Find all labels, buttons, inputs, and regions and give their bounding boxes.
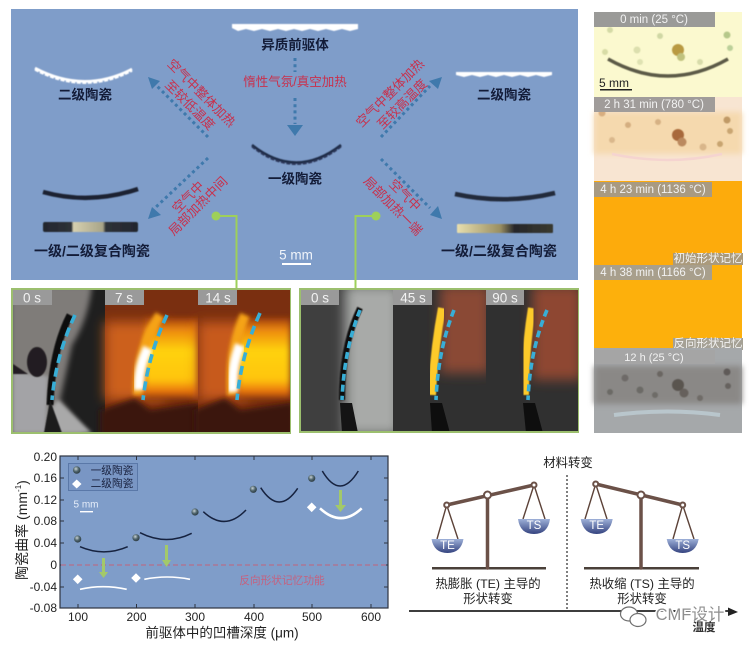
y axis tick labels: 0 [50, 558, 57, 572]
x axis title: 前驱体中的凹槽深度 (μm) [145, 624, 299, 640]
scale: thermal shrinkage dominant: TE [589, 520, 604, 532]
panel: local heating at one end photo strip [300, 285, 582, 435]
y axis tick labels: -0.08 [30, 601, 57, 615]
label: right composite ceramic: 一级/二级复合陶瓷 [441, 243, 557, 259]
label: left composite ceramic: 一级/二级复合陶瓷 [34, 243, 150, 259]
y axis title: -1 [14, 484, 22, 492]
y axis tick labels [30, 450, 57, 615]
zero reference line [61, 564, 387, 566]
time tags [301, 290, 524, 306]
photo: 0 s [13, 290, 105, 432]
scale: thermal shrinkage dominant [581, 482, 699, 568]
connector: end heating to right photos [356, 212, 380, 289]
label: temperature: 温度 [692, 620, 716, 634]
time tags: 7 s [115, 290, 133, 306]
y axis tick labels: 0.12 [34, 493, 57, 507]
y axis tick labels: 0.20 [34, 450, 57, 464]
x axis tick labels: 200 [126, 610, 147, 624]
legend [68, 464, 138, 490]
frame: 2 h 31 min [594, 97, 742, 181]
primary ceramic data points [74, 475, 315, 543]
frame: 4 h 23 min: 初始形状记忆 [674, 251, 742, 265]
arrow: to left secondary ceramic [148, 77, 208, 137]
primary ceramic specimen [252, 145, 341, 164]
dashed reference lines [342, 310, 547, 400]
right secondary ceramic specimen [456, 72, 552, 77]
chart: curvature vs groove depth [14, 450, 388, 640]
arrow: precursor to primary ceramic [287, 58, 303, 136]
x axis tick labels: 100 [68, 610, 88, 624]
legend: 二级陶瓷 [91, 477, 134, 490]
scale: thermal expansion dominant: TE [440, 540, 455, 552]
photo: 45 s [393, 285, 490, 433]
watermark icon: chat bubbles [620, 607, 646, 626]
secondary ceramic data points [73, 502, 317, 584]
time tags: 14 s [205, 290, 231, 306]
photo: 0 s [301, 290, 393, 431]
label: heat whole in air to higher temperature: 空气中整体加热 [353, 56, 427, 130]
label: right secondary ceramic: 二级陶瓷 [477, 86, 531, 102]
right composite ceramic specimens [455, 193, 555, 233]
frame: 4 h 38 min: 4 h 38 min (1166 °C) [600, 267, 706, 279]
label: material transition: 材料转变 [543, 455, 593, 470]
frame: 4 h 38 min: 反向形状记忆 [674, 336, 742, 350]
caption: thermal shrinkage dominant [589, 576, 695, 606]
photo: 90 s [486, 285, 582, 433]
caption: thermal shrinkage dominant: 热收缩 (TS) 主导的 [589, 576, 695, 591]
connector: middle heating to left photos [212, 212, 236, 289]
frame: 12 h [594, 348, 742, 433]
scale bar: 5 mm: 5 mm [279, 248, 313, 262]
photo: 14 s [194, 290, 294, 440]
time tags: 90 s [492, 290, 518, 306]
y axis tick labels: 0.16 [34, 471, 57, 485]
secondary ceramic specimens [80, 508, 362, 589]
label: local heating in the middle: 空气中 [169, 178, 207, 216]
watermark text: CMF设计 [656, 605, 724, 624]
panel: local heating at middle photo strip [10, 285, 294, 440]
y axis tick labels: 0.04 [34, 536, 57, 550]
legend: 一级陶瓷 [91, 464, 134, 477]
y axis title: ) [14, 480, 30, 485]
x axis tick labels: 500 [302, 610, 322, 624]
arrow: to right composite ceramic [381, 159, 442, 219]
time tags: 0 s [23, 290, 41, 306]
y axis tick labels: -0.04 [30, 580, 57, 594]
diagram: temperature-driven balance [409, 455, 738, 634]
frame: 0 min [594, 12, 742, 97]
caption: thermal expansion dominant: 形状转变 [463, 591, 513, 606]
label: local heating at one end: 局部加热一端 [361, 174, 426, 239]
scale: thermal shrinkage dominant: TS [675, 540, 690, 552]
y axis title: 陶瓷曲率 (mm [14, 492, 30, 580]
left composite ceramic specimens [43, 189, 138, 232]
caption: thermal expansion dominant [435, 576, 541, 606]
arrow: to right secondary ceramic [381, 77, 442, 137]
label: left secondary ceramic: 二级陶瓷 [58, 86, 112, 102]
label: local heating at one end: 空气中 [386, 176, 424, 214]
frame: 4 h 23 min [594, 181, 743, 268]
panel: thermal sequence photos [594, 12, 743, 433]
caption: thermal shrinkage dominant: 形状转变 [617, 591, 667, 606]
panel: ceramic transformation overview [11, 9, 578, 280]
label: reverse shape memory function: 反向形状记忆功能 [239, 574, 325, 587]
time tags [13, 290, 237, 306]
left secondary ceramic specimen [35, 68, 132, 83]
frame: 0 min: 5 mm [599, 76, 629, 90]
transition divider [566, 475, 568, 611]
photo: 7 s [100, 290, 202, 440]
y axis tick labels: 0.08 [34, 514, 57, 528]
caption: thermal expansion dominant: 热膨胀 (TE) 主导的 [435, 576, 541, 591]
label: precursor: 异质前驱体 [261, 36, 329, 52]
scale bar: 5 mm: 5 mm [74, 500, 98, 510]
frame: 0 min: 0 min (25 °C) [620, 14, 688, 26]
time tags: 0 s [311, 290, 329, 306]
x axis tick labels: 300 [185, 610, 205, 624]
scale: thermal expansion dominant: TS [527, 520, 542, 532]
arrow: temperature axis [409, 608, 738, 616]
frame: 4 h 23 min: 4 h 23 min (1136 °C) [600, 184, 706, 196]
label: inert atmosphere heating: 惰性气氛/真空加热 [243, 74, 347, 89]
primary ceramic specimens [80, 471, 358, 552]
label: heat whole in air to lower temperature: 至较低温度 [162, 77, 218, 133]
scale: thermal expansion dominant [432, 482, 550, 568]
x axis tick labels [68, 610, 381, 624]
label: local heating in the middle: 局部加热中间 [166, 174, 230, 238]
x axis tick labels: 400 [244, 610, 264, 624]
precursor specimen [232, 24, 358, 31]
dashed reference lines [52, 313, 260, 400]
label: heat whole in air to lower temperature: 空气中整体加热 [165, 56, 239, 130]
frame: 4 h 38 min [594, 265, 743, 350]
arrow: to left composite ceramic [148, 158, 208, 219]
frame: 12 h: 12 h (25 °C) [624, 352, 684, 364]
time tags: 45 s [400, 290, 426, 306]
label: primary ceramic: 一级陶瓷 [268, 170, 322, 186]
x axis tick labels: 600 [361, 610, 381, 624]
axis ticks [60, 456, 388, 608]
green arrows: curvature change [99, 490, 346, 578]
frame: 2 h 31 min: 2 h 31 min (780 °C) [604, 99, 704, 111]
label: heat whole in air to higher temperature: 至较高温度 [374, 76, 430, 132]
